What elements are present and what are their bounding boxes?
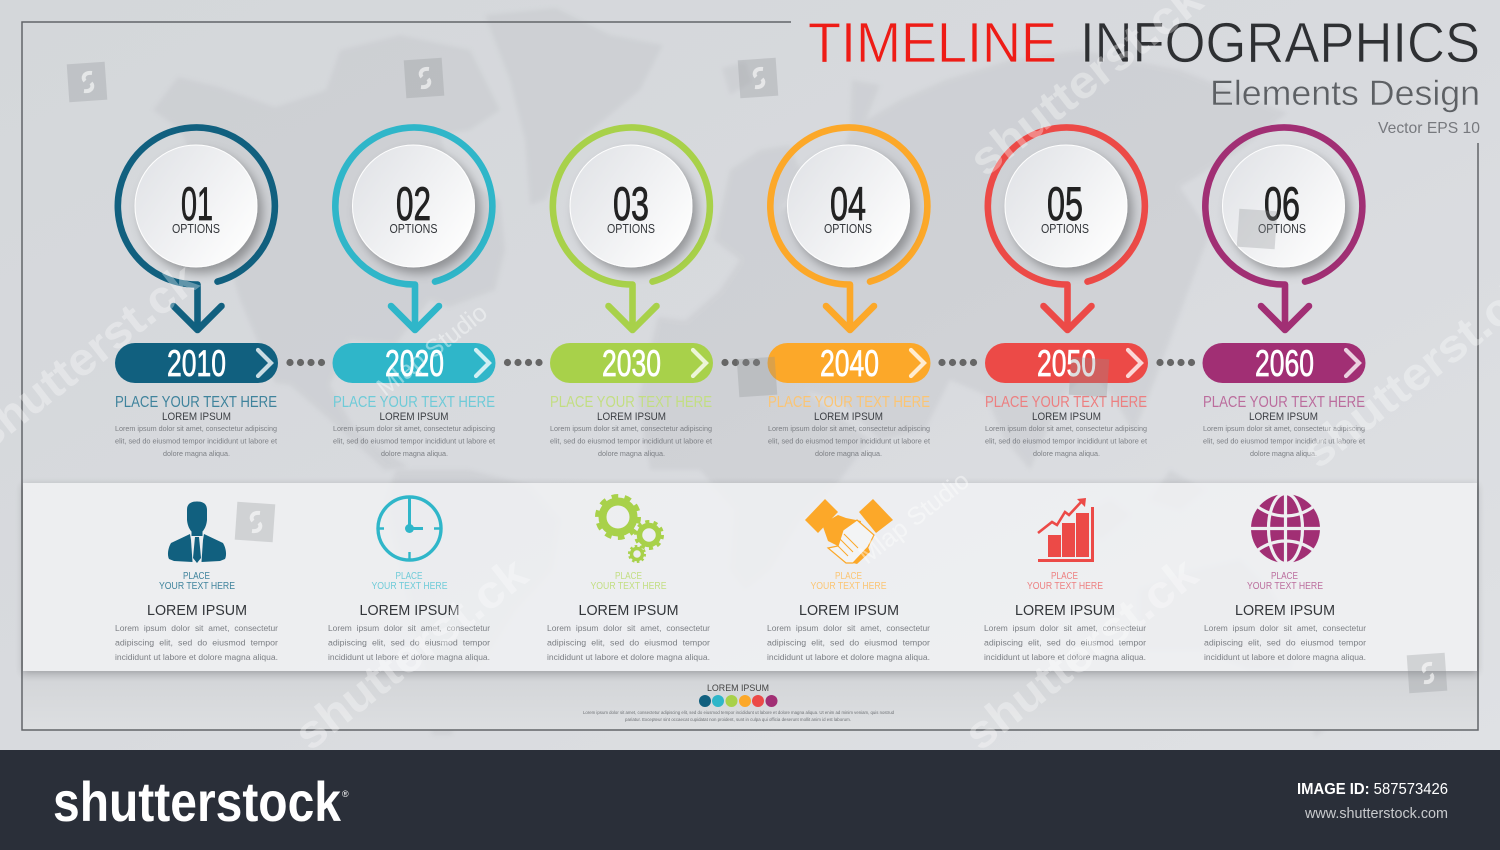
watermarks: shutterst.ck [284, 546, 537, 760]
text block 05: dolore magna aliqua. [1033, 449, 1100, 458]
number 06: 06 [1264, 177, 1300, 230]
panel column 2 text [328, 571, 490, 662]
text block 06: LOREM IPSUM [1249, 411, 1318, 423]
panel column 5 text: LOREM IPSUM [1015, 602, 1115, 619]
panel column 6 text: Lorem ipsum dolor sit amet, consectetur [1204, 623, 1366, 633]
text block 02: PLACE YOUR TEXT HERE [333, 394, 495, 411]
text block 04 [768, 394, 930, 458]
disc 02 [352, 145, 474, 267]
world map background [153, 8, 1368, 737]
panel column 5 text: PLACE [1051, 571, 1078, 582]
text block 02: dolore magna aliqua. [381, 449, 448, 458]
panel column 4 text [767, 571, 930, 662]
icon: handshake [805, 499, 893, 564]
text block 04: elit, sed do eiusmod tempor incididunt ut labore et [768, 436, 930, 446]
number 04: 04 [830, 177, 866, 230]
icon: businessman [168, 502, 226, 563]
title: Elements Design [1210, 74, 1480, 113]
number 05: OPTIONS [1041, 222, 1089, 236]
title [808, 11, 1480, 137]
number 05 [1041, 177, 1089, 236]
text block 01: LOREM IPSUM [162, 411, 231, 423]
number 03 [607, 177, 655, 236]
text block 01: PLACE YOUR TEXT HERE [115, 394, 277, 411]
panel column 6 text: PLACE [1271, 571, 1298, 582]
text block 06: dolore magna aliqua. [1250, 449, 1317, 458]
connector dots 4 [938, 359, 977, 366]
panel column 3 text: incididunt ut labore et dolore magna aliqua. [547, 652, 710, 662]
year pill 2010 [115, 343, 278, 384]
year pill 2040 [768, 343, 930, 384]
number 03: OPTIONS [607, 222, 655, 236]
connector dots 5 [1156, 359, 1195, 366]
text block 03: Lorem ipsum dolor sit amet, consectetur adipiscing [550, 424, 712, 433]
text block 02: LOREM IPSUM [380, 411, 448, 423]
number 04: OPTIONS [824, 222, 872, 236]
number 01: OPTIONS [172, 222, 220, 236]
number 03: 03 [613, 177, 649, 230]
watermarks: shutterst.ck [954, 546, 1207, 760]
ring and arrow 05 [988, 128, 1145, 330]
text block 01: elit, sed do eiusmod tempor incididunt ut labore et [115, 436, 277, 446]
lower gradient band [23, 671, 1477, 730]
year pill 2020 [332, 343, 496, 384]
text block 06: PLACE YOUR TEXT HERE [1203, 394, 1365, 411]
text block 05: Lorem ipsum dolor sit amet, consectetur adipiscing [985, 424, 1147, 433]
year pill 2010: 2010 [167, 343, 226, 384]
legend: pariatur. Excepteur sint occaecat cupidatat non proident, sunt in culpa qui officia deserunt mollit anim id est laborum. [625, 717, 851, 722]
number 04 [824, 177, 872, 236]
text block 04: Lorem ipsum dolor sit amet, consectetur adipiscing [768, 424, 930, 433]
panel column 6 text: LOREM IPSUM [1235, 602, 1335, 619]
panel column 1 text: LOREM IPSUM [147, 602, 247, 619]
number 06 [1258, 177, 1306, 236]
year pill 2030 [550, 343, 713, 384]
footer bar: IMAGE ID: 587573426 [1297, 781, 1448, 798]
footer bar: shutterstock [53, 770, 342, 833]
disc 04 [788, 145, 910, 267]
panel column 2 text: YOUR TEXT HERE [372, 581, 448, 592]
text block 04: LOREM IPSUM [814, 411, 883, 423]
text block 03 [550, 394, 712, 458]
year pill 2020: 2020 [385, 343, 444, 384]
panel column 4 text: LOREM IPSUM [799, 602, 899, 619]
panel column 5 text [984, 571, 1146, 662]
panel column 6 text: adipiscing elit, sed do eiusmod tempor [1204, 638, 1366, 648]
panel column 6 text [1204, 571, 1366, 662]
panel column 2 text: incididunt ut labore et dolore magna aliqua. [328, 652, 490, 662]
connector dots 2 [504, 359, 543, 366]
panel column 5 text: incididunt ut labore et dolore magna aliqua. [984, 652, 1146, 662]
timeline item 02 [332, 128, 496, 458]
watermarks: Mlap Studio [371, 298, 493, 402]
text block 03: elit, sed do eiusmod tempor incididunt ut labore et [550, 436, 712, 446]
ring and arrow 03 [553, 128, 710, 330]
text block 06: elit, sed do eiusmod tempor incididunt ut labore et [1203, 436, 1365, 446]
text block 02 [333, 394, 495, 458]
panel column 3 text: LOREM IPSUM [578, 602, 678, 619]
icon: clock [378, 497, 441, 560]
lower panel [23, 483, 1477, 671]
footer bar [0, 750, 1500, 850]
text block 04: PLACE YOUR TEXT HERE [768, 394, 930, 411]
number 01 [172, 177, 220, 236]
panel column 6 text: incididunt ut labore et dolore magna aliqua. [1204, 652, 1366, 662]
panel column 4 text: Lorem ipsum dolor sit amet, consectetur [767, 623, 930, 633]
year pill 2060: 2060 [1255, 343, 1314, 384]
panel column 2 text: LOREM IPSUM [360, 602, 460, 619]
text block 06: Lorem ipsum dolor sit amet, consectetur adipiscing [1203, 424, 1365, 433]
ring and arrow 01 [118, 128, 275, 330]
connector dots 3 [721, 359, 760, 366]
icon: globe [1251, 494, 1320, 564]
timeline item 05 [985, 128, 1148, 458]
text block 01: Lorem ipsum dolor sit amet, consectetur adipiscing [115, 424, 277, 433]
text block 01 [115, 394, 277, 458]
panel column 4 text: incididunt ut labore et dolore magna aliqua. [767, 652, 930, 662]
text block 03: dolore magna aliqua. [598, 449, 665, 458]
title: Vector EPS 10 [1378, 120, 1480, 137]
year pill 2040: 2040 [820, 343, 879, 384]
panel column 3 text: adipiscing elit, sed do eiusmod tempor [547, 638, 710, 648]
year pill 2030: 2030 [602, 343, 661, 384]
panel column 3 text [547, 571, 710, 662]
year pill 2050 [985, 343, 1148, 384]
timeline item 04 [768, 128, 930, 458]
number 01: 01 [181, 177, 213, 230]
panel column 1 text [115, 571, 278, 662]
disc 06 [1222, 145, 1344, 267]
ring and arrow 02 [335, 128, 492, 330]
panel column 1 text: adipiscing elit, sed do eiusmod tempor [115, 638, 278, 648]
title: TIMELINE [808, 11, 1057, 75]
text block 05 [985, 394, 1147, 458]
text block 06 [1203, 394, 1365, 458]
legend: LOREM IPSUM [707, 683, 769, 693]
panel column 2 text: adipiscing elit, sed do eiusmod tempor [328, 638, 490, 648]
legend: Lorem ipsum dolor sit amet, consectetur adipiscing elit, sed do eiusmod tempor incididunt ut labore et dolore magna aliqua. Ut enim ad minim veniam, quis nostrud [583, 710, 894, 715]
panel column 5 text: YOUR TEXT HERE [1027, 581, 1103, 592]
text block 04: dolore magna aliqua. [815, 449, 882, 458]
footer bar: www.shutterstock.com [1304, 805, 1448, 822]
watermarks: Mlap Studio [853, 466, 975, 570]
icon: rising bar chart [1038, 498, 1094, 562]
panel column 1 text: incididunt ut labore et dolore magna aliqua. [115, 652, 278, 662]
disc 03 [570, 145, 692, 267]
text block 02: Lorem ipsum dolor sit amet, consectetur adipiscing [333, 424, 495, 433]
text block 01: dolore magna aliqua. [163, 449, 230, 458]
text block 03: PLACE YOUR TEXT HERE [550, 394, 712, 411]
panel column 4 text: PLACE [835, 571, 862, 582]
year pill 2060 [1202, 343, 1366, 384]
number 02 [390, 177, 438, 236]
ring and arrow 04 [770, 128, 927, 330]
panel column 1 text: PLACE [183, 571, 210, 582]
number 05: 05 [1047, 177, 1083, 230]
text block 05: elit, sed do eiusmod tempor incididunt ut labore et [985, 436, 1147, 446]
panel column 5 text: adipiscing elit, sed do eiusmod tempor [984, 638, 1146, 648]
text block 05: PLACE YOUR TEXT HERE [985, 394, 1147, 411]
panel column 1 text: Lorem ipsum dolor sit amet, consectetur [115, 623, 278, 633]
disc 05 [1005, 145, 1127, 267]
timeline item 03 [550, 128, 713, 458]
panel column 4 text: YOUR TEXT HERE [810, 581, 887, 592]
disc 01 [135, 145, 257, 267]
panel column 4 text: adipiscing elit, sed do eiusmod tempor [767, 638, 930, 648]
number 06: OPTIONS [1258, 222, 1306, 236]
ring and arrow 06 [1205, 128, 1362, 330]
panel column 1 text: YOUR TEXT HERE [159, 581, 235, 592]
icon: gears [598, 496, 662, 562]
panel column 5 text: Lorem ipsum dolor sit amet, consectetur [984, 623, 1146, 633]
text block 02: elit, sed do eiusmod tempor incididunt ut labore et [333, 436, 495, 446]
panel column 3 text: YOUR TEXT HERE [590, 581, 667, 592]
text block 03: LOREM IPSUM [597, 411, 666, 423]
timeline item 01 [115, 128, 278, 458]
panel column 2 text: PLACE [396, 571, 423, 582]
timeline item 06 [1202, 128, 1366, 458]
footer bar: ® [342, 789, 349, 799]
connector dots 1 [286, 359, 325, 366]
panel column 3 text: PLACE [615, 571, 642, 582]
number 02: OPTIONS [390, 222, 438, 236]
panel column 3 text: Lorem ipsum dolor sit amet, consectetur [547, 623, 710, 633]
panel column 6 text: YOUR TEXT HERE [1247, 581, 1323, 592]
year pill 2050: 2050 [1037, 343, 1096, 384]
number 02: 02 [396, 177, 431, 230]
panel column 2 text: Lorem ipsum dolor sit amet, consectetur [328, 623, 490, 633]
text block 05: LOREM IPSUM [1032, 411, 1101, 423]
legend [583, 683, 894, 722]
